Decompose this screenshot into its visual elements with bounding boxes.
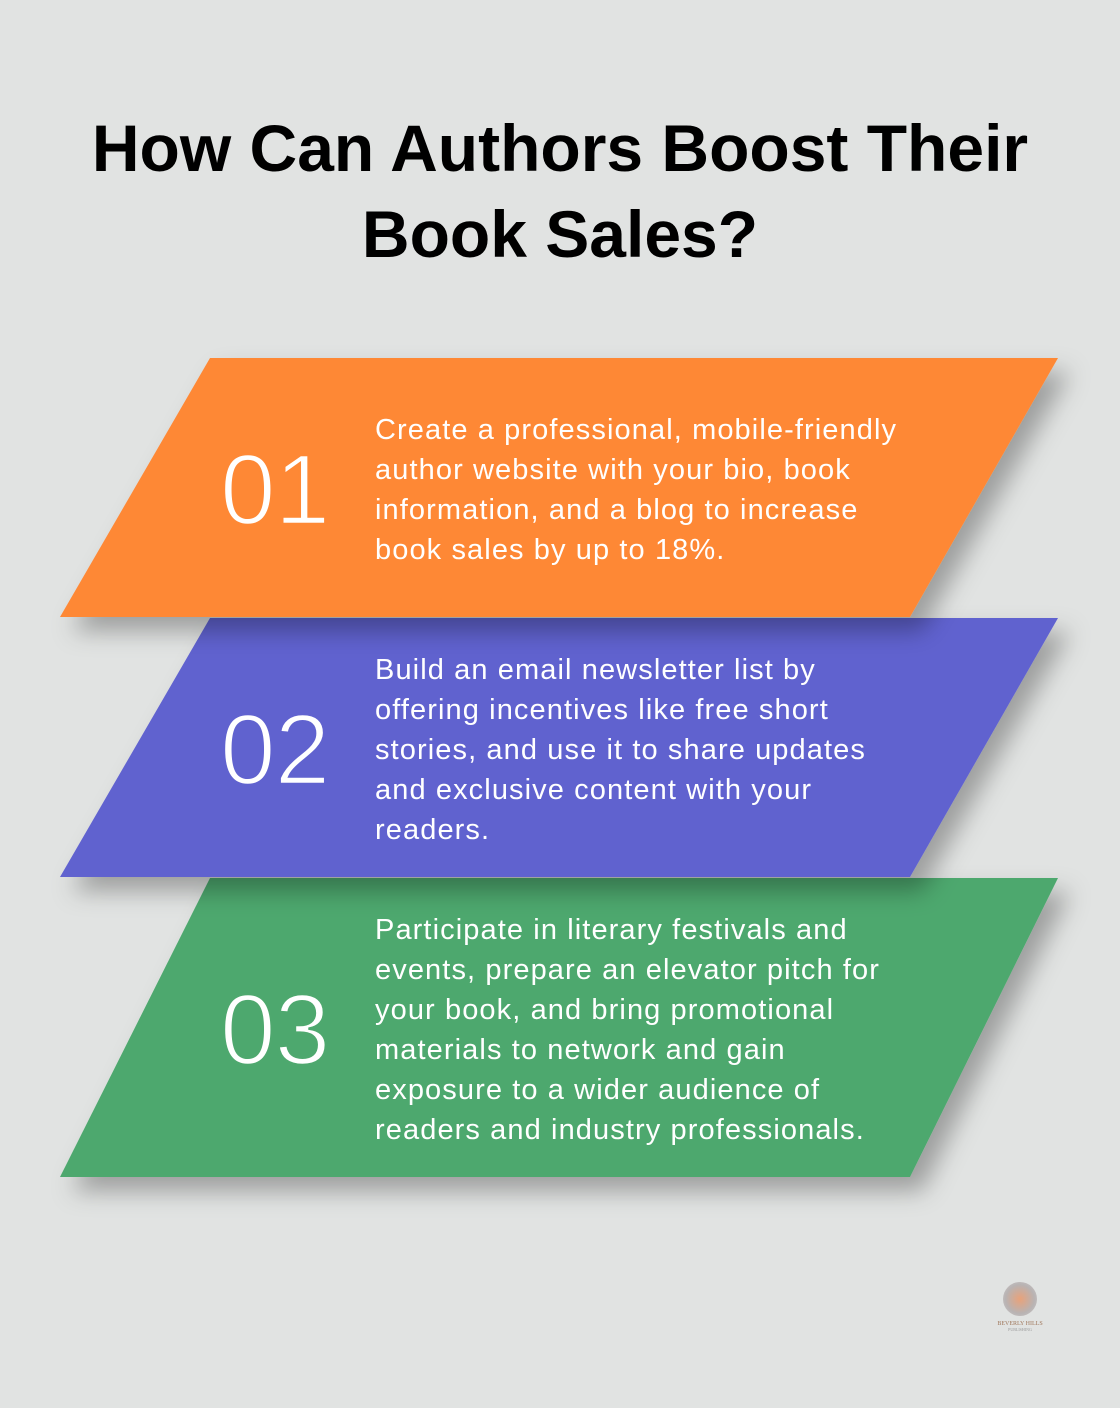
step 1 text: author website with your bio, book [375,454,851,486]
step 3 text: your book, and bring promotional [375,994,834,1026]
step 3 text: readers and industry professionals. [375,1114,865,1146]
step 2 text: stories, and use it to share updates [375,734,866,766]
step 1 text: book sales by up to 18%. [375,534,725,566]
logo: PUBLISHING [1008,1327,1032,1332]
step 1 text: Create a professional, mobile-friendly [375,414,897,446]
logo: BEVERLY HILLS [997,1321,1043,1327]
logo [997,1282,1043,1332]
step 2 text: offering incentives like free short [375,694,829,726]
step 3 text: Participate in literary festivals and [375,914,848,946]
step 3 text [375,914,880,1146]
step 1 text [375,414,897,566]
step 3 text: events, prepare an elevator pitch for [375,954,880,986]
panel: step 3 [60,878,1058,1177]
panel: step 1 [60,358,1058,617]
title: How Can Authors Boost Their [92,111,1028,185]
step 3 text: exposure to a wider audience of [375,1074,820,1106]
title: Book Sales? [362,197,758,271]
step 2 number: 02 [220,694,329,806]
step 1 text: information, and a blog to increase [375,494,858,526]
panel: step 2 [60,618,1058,877]
step 2 text: Build an email newsletter list by [375,654,816,686]
step 2 text: readers. [375,814,490,846]
step 3 number: 03 [220,974,329,1086]
step 1 number: 01 [220,434,329,546]
step 2 text [375,654,866,846]
step 3 text: materials to network and gain [375,1034,786,1066]
title [92,111,1028,271]
step 2 text: and exclusive content with your [375,774,812,806]
